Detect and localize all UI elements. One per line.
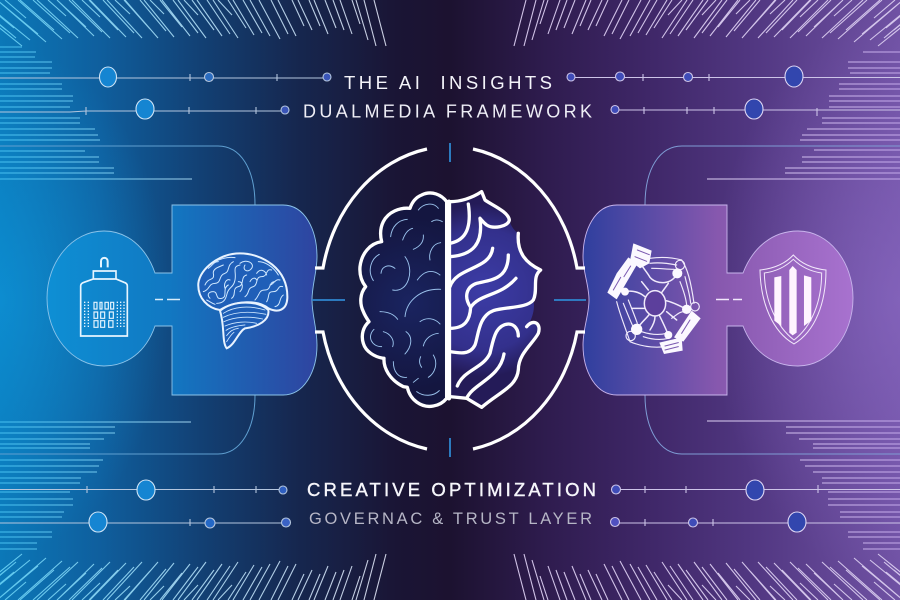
connector line: top left [0, 146, 255, 205]
corner hatching: bottom right [514, 554, 900, 600]
corner hatching: bottom left [0, 554, 386, 600]
connector line: bottom right [645, 395, 900, 454]
icon: network of capsules [607, 243, 701, 354]
dashed link [155, 298, 180, 300]
corner hatching: top left [0, 0, 386, 46]
ring ticks [312, 143, 586, 457]
node line: bottom left 2 [0, 512, 290, 532]
node line: top right 2 [611, 99, 900, 119]
capsule stripes [613, 250, 690, 350]
connector line: top right [645, 146, 900, 205]
panel: right output module [583, 205, 853, 395]
right edge data lines [707, 52, 900, 549]
node line: bottom right 1 [612, 480, 900, 500]
node line: bottom right 2 [610, 512, 900, 532]
icon: side-view brain [198, 253, 287, 348]
central brain [360, 192, 541, 407]
midline [442, 202, 455, 398]
left hemisphere [360, 193, 447, 406]
left edge data lines [0, 47, 192, 549]
subtitle: creative optimization: CREATIVE OPTIMIZATION [307, 479, 596, 500]
central cell [644, 291, 666, 316]
title line 1: THE AI INSIGHTS [344, 72, 552, 93]
subtitle: governance layer: GOVERNAC & TRUST LAYER [309, 510, 592, 528]
dashed link [716, 298, 742, 300]
node line: bottom left 1 [0, 480, 287, 500]
connector line: bottom left [0, 395, 255, 454]
title line 2: DUALMEDIA FRAMEWORK [303, 102, 592, 122]
node line: top left 2 [0, 99, 289, 119]
panel: left input module [47, 205, 317, 395]
node line: top left 1 [0, 67, 331, 87]
icon: data bottle [81, 258, 127, 336]
spokes [625, 265, 687, 335]
ring nodes [675, 260, 685, 270]
central brain ring [312, 143, 586, 457]
icon: shield [760, 255, 826, 344]
ring arcs [315, 149, 585, 449]
outer ring and ribs [617, 257, 694, 347]
joint nodes and capsules [607, 243, 701, 354]
node line: top right 1 [567, 66, 900, 87]
right hemisphere [450, 192, 541, 407]
corner hatching: top right [514, 0, 900, 46]
